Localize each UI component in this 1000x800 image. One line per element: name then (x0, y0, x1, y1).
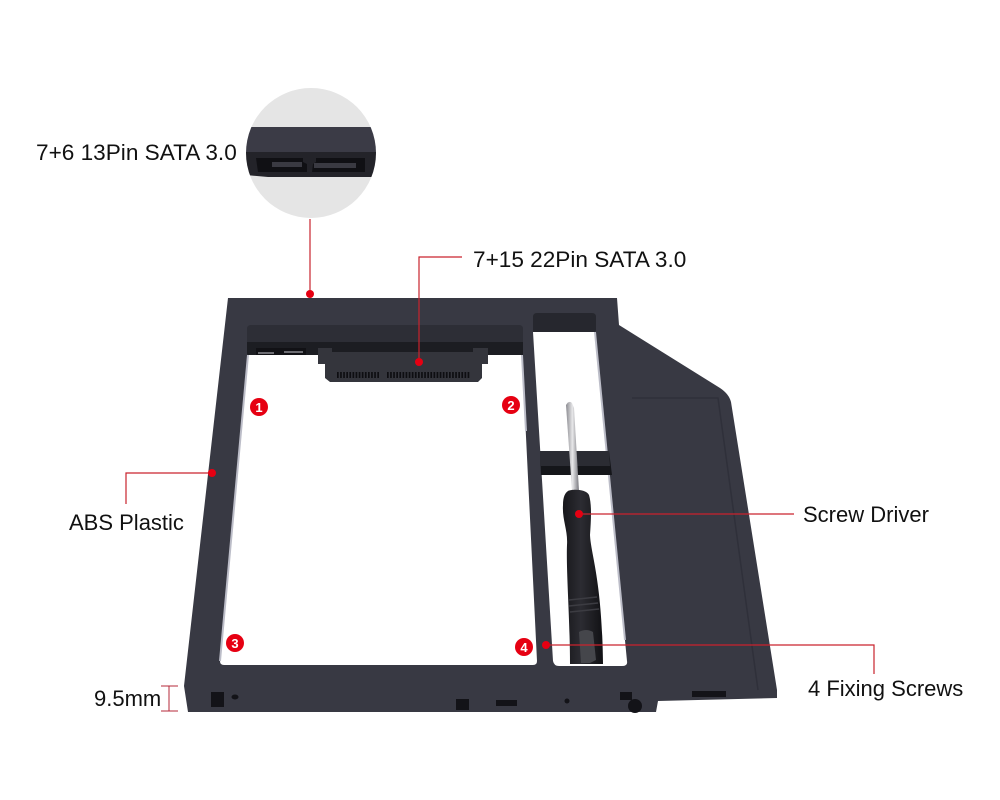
callout: Screw Driver: Screw Driver (803, 502, 929, 527)
badge: screw position 4 (515, 638, 533, 656)
inset: SATA connector close-up (240, 88, 380, 218)
recess above main opening (247, 325, 523, 355)
callout: ABS Plastic (69, 469, 216, 535)
icon: screwdriver (563, 402, 603, 664)
badge: screw position 3 (226, 634, 244, 652)
recess in second opening (533, 313, 596, 332)
badge: screw position 2: 2 (507, 398, 515, 413)
small latch detail (256, 348, 306, 355)
badge: screw position 1: 1 (255, 400, 263, 415)
device: optical bay caddy frame (184, 298, 777, 713)
badge: screw position 4: 4 (520, 640, 528, 655)
component: 22-pin SATA connector (318, 348, 488, 382)
callout: 7+6 13Pin SATA 3.0: 7+6 13Pin SATA 3.0 (36, 140, 237, 165)
callout: Screw Driver (575, 502, 929, 527)
callout: 7+15 22Pin SATA 3.0: 7+15 22Pin SATA 3.0 (473, 247, 686, 272)
badge: screw position 1 (250, 398, 268, 416)
callout: 4 Fixing Screws (542, 641, 963, 701)
badge: screw position 2 (502, 396, 520, 414)
callout: 4 Fixing Screws: 4 Fixing Screws (808, 676, 963, 701)
side panel embossing (632, 398, 758, 690)
callout: 7+6 13Pin SATA 3.0 (36, 140, 314, 298)
metal edge highlights (220, 332, 625, 661)
bottom edge slots (211, 691, 726, 713)
badge: screw position 3: 3 (231, 636, 239, 651)
cross bar (540, 451, 612, 475)
callout: 7+15 22Pin SATA 3.0 (415, 247, 686, 366)
callout: ABS Plastic: ABS Plastic (69, 510, 184, 535)
dimension: 9.5mm: 9.5mm (94, 686, 161, 711)
